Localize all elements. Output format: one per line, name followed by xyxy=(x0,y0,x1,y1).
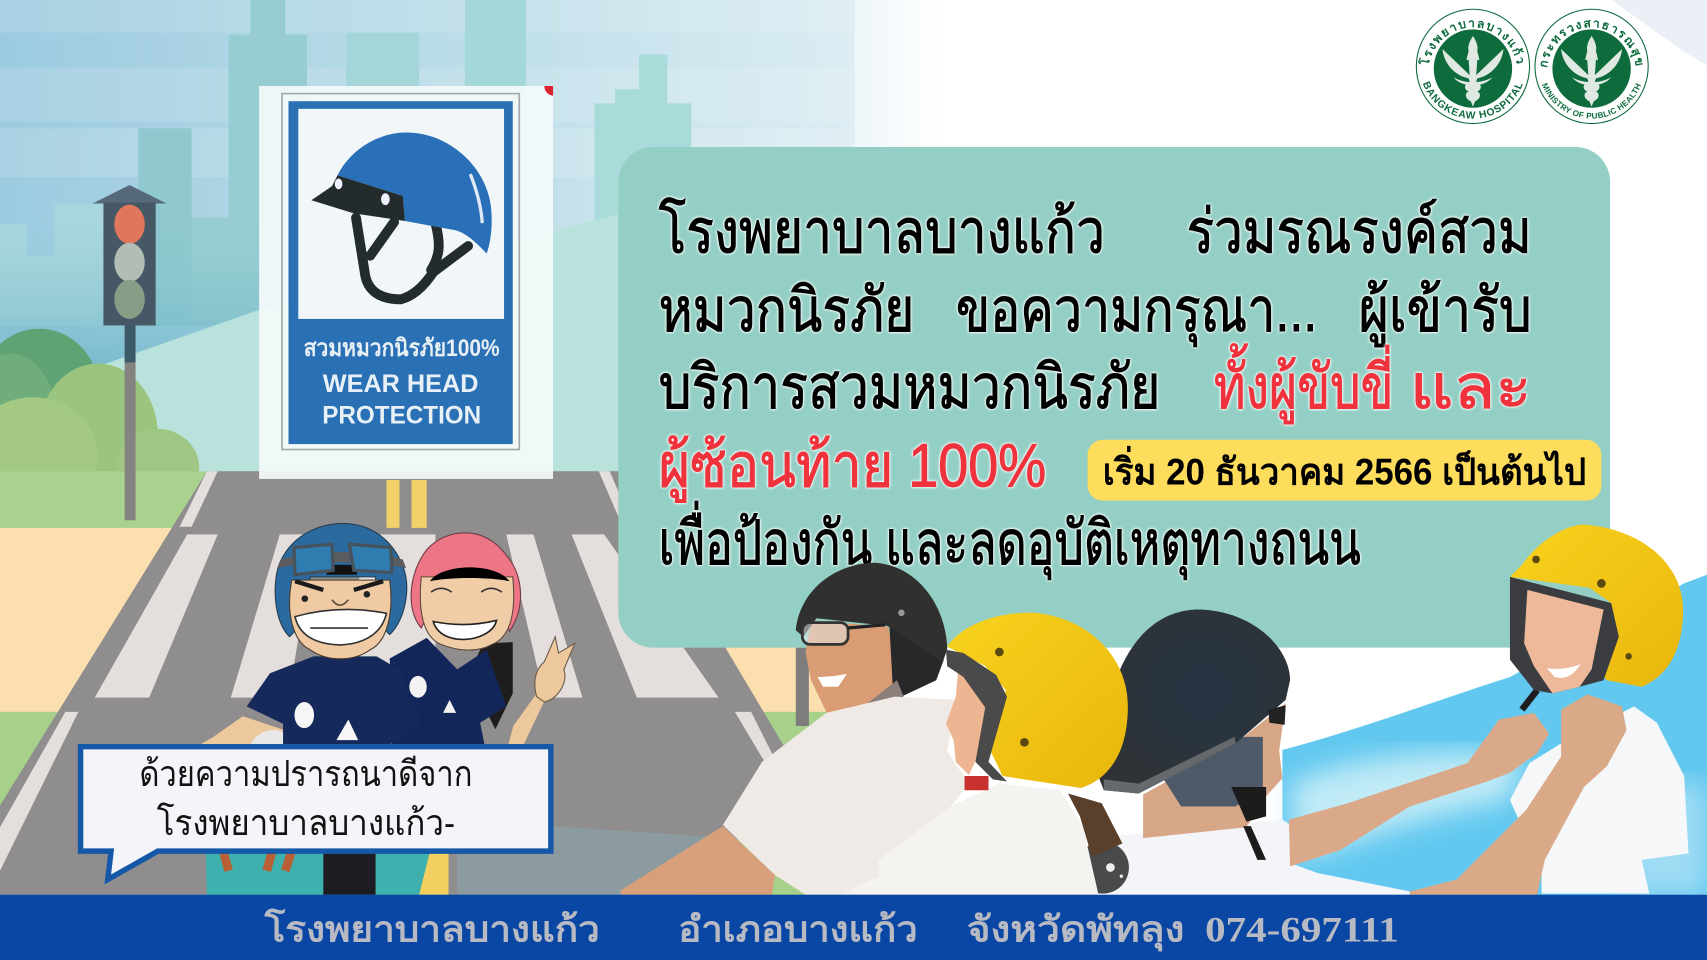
message line 2 xyxy=(659,276,1532,347)
footer bar: 074-697111 xyxy=(1205,909,1399,949)
logo: Bangkeaw Hospital: โรงพยาบาลบางแก้ว xyxy=(1418,20,1524,64)
panel: helmet safety sign xyxy=(259,86,553,479)
message line 3 xyxy=(659,343,1532,424)
message line 2: หมวกนิรภัย xyxy=(659,276,914,344)
footer bar: โรงพยาบาลบางแก้ว xyxy=(263,907,600,949)
message line 3: บริการสวมหมวกนิรภัย xyxy=(659,353,1160,421)
cartoon riders xyxy=(200,524,575,895)
wave background right xyxy=(1282,575,1707,895)
footer bar xyxy=(0,895,1707,960)
speech bubble: โรงพยาบาลบางแก้ว- xyxy=(157,802,455,843)
logo: Bangkeaw Hospital xyxy=(1416,8,1530,124)
sign caption: สวมหมวกนิรภัย100% xyxy=(304,335,500,362)
dark round badge xyxy=(1077,841,1129,894)
girl with yellow helmet xyxy=(840,613,1128,895)
logo: Ministry of Public Health xyxy=(1534,8,1649,124)
icon: blue helmet xyxy=(311,133,492,299)
message line 3: ทั้งผู้ขับขี่ xyxy=(1214,343,1393,424)
message line 2: ขอความกรุณา... xyxy=(956,276,1317,347)
logo: Ministry of Public Health: กระทรวงสาธารณสุข xyxy=(1540,20,1643,68)
child with yellow helmet xyxy=(1410,525,1688,895)
trees xyxy=(0,329,199,517)
speech bubble: ด้วยความปรารถนาดีจาก xyxy=(139,753,472,794)
photo: family wearing helmets xyxy=(621,525,1688,895)
message line 5: เพื่อป้องกัน และลดอุบัติเหตุทางถนน xyxy=(659,501,1361,580)
start date badge xyxy=(1088,440,1601,501)
father with dark helmet xyxy=(1100,610,1549,895)
logo: Ministry of Public Health: MINISTRY OF PUBLIC HEALTH xyxy=(1542,82,1641,119)
message line 4: ผู้ซ้อนท้าย 100% xyxy=(659,432,1046,503)
message line 1: ร่วมรณรงค์สวม xyxy=(1187,198,1532,266)
hillside diagonal xyxy=(0,147,855,479)
sign caption: WEAR HEAD xyxy=(323,370,478,398)
city skyline xyxy=(0,0,691,327)
man with black helmet xyxy=(621,563,969,895)
footer bar: จังหวัดพัทลุง xyxy=(967,909,1184,951)
message line 1: โรงพยาบาลบางแก้ว xyxy=(659,198,1105,266)
sign caption xyxy=(304,335,500,429)
start date badge: เริ่ม 20 ธันวาคม 2566 เป็นต้นไป xyxy=(1103,445,1586,492)
ground xyxy=(0,471,855,531)
sign caption: PROTECTION xyxy=(322,401,481,429)
panel: campaign message xyxy=(618,147,1610,648)
message line 2: ผู้เข้ารับ xyxy=(1359,276,1532,347)
rider: woman xyxy=(390,533,575,744)
message line 3: และ xyxy=(1410,353,1532,421)
scooter xyxy=(206,851,430,895)
speech bubble xyxy=(81,747,551,879)
logo: Bangkeaw Hospital: BANGKEAW HOSPITAL xyxy=(1422,81,1523,119)
road xyxy=(0,471,788,895)
rider: man xyxy=(200,524,421,744)
footer bar: อำเภอบางแก้ว xyxy=(678,909,918,949)
icon: traffic light xyxy=(93,185,167,520)
message line 1 xyxy=(659,198,1532,266)
